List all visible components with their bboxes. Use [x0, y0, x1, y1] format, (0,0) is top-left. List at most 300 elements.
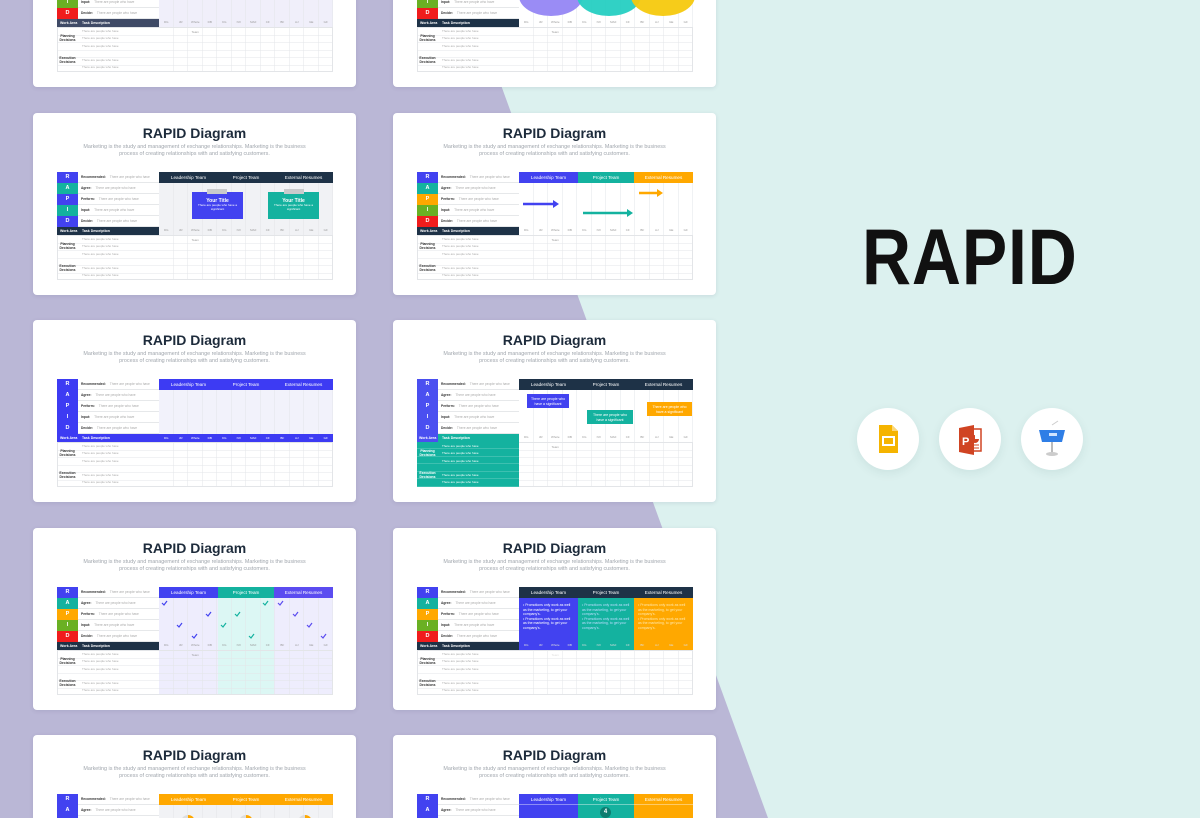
- card: row4 left checkmarks: RAPID Diagram: [143, 540, 246, 556]
- card: row2 right arrows: AJ: [655, 228, 658, 232]
- card: row3 right boxes: process of creating relationships with and satisfying customers.: [479, 358, 630, 364]
- card: row4 right filled columns: I: [427, 622, 428, 628]
- card: row3 left all blue: BF: [280, 436, 284, 440]
- card: row4 left checkmarks: Execution Decisions: [59, 679, 76, 687]
- card: row4 right filled columns: MAF: [610, 643, 616, 647]
- card: row4 right filled columns: GE: [669, 643, 673, 647]
- card: row3 left all blue: External Resumes: [285, 382, 322, 387]
- boxes: [527, 394, 569, 408]
- card: row4 left checkmarks: Decide: There are people who have: [81, 634, 137, 638]
- card: row1 left: JR: [179, 20, 183, 24]
- card: row2 right arrows: Marketing is the study and management of exchange relationships. Marketing is the business: [443, 144, 666, 150]
- card: row3 right boxes: Agree: There are people who have: [441, 393, 496, 397]
- card: row2 left sticky notes: D: [66, 218, 69, 224]
- card: row4 left checkmarks: Leadership Team: [171, 590, 206, 595]
- card: row3 right boxes: There are people who have: [442, 444, 479, 448]
- card: row3 right boxes: R: [426, 381, 429, 387]
- card: row3 left all blue: Agree: There are people who have: [81, 393, 136, 397]
- card: row5 right colored columns: A: [426, 807, 429, 813]
- card: row1 left: AJ: [295, 20, 298, 24]
- card: row4 left checkmarks: KG: [222, 643, 226, 647]
- card: row3 left all blue: process of creating relationships with and satisfying customers.: [119, 358, 270, 364]
- card: row3 right boxes: I: [427, 414, 428, 420]
- card: row1 left: [33, 0, 356, 87]
- card: row4 left checkmarks: Project Team: [233, 590, 259, 595]
- card: row1 right venn: Whole Team: [551, 20, 560, 34]
- card: row4 left checkmarks: DB: [208, 643, 212, 647]
- card: row3 right boxes: CF: [626, 435, 630, 439]
- card: row3 left all blue: There are people who have: [82, 451, 119, 455]
- card: row5 left orange headers: External Resumes: [285, 797, 322, 802]
- card: row1 right venn: Execution Decisions: [419, 56, 436, 64]
- card: row3 right boxes: P: [426, 403, 429, 409]
- card: row5 left orange headers: RAPID Diagram: [143, 747, 246, 763]
- card: row3 left all blue: CF: [266, 436, 270, 440]
- card: row3 right boxes: There are people who have: [442, 451, 479, 455]
- card: row4 right filled columns: Execution Decisions: [419, 679, 436, 687]
- card: row1 right venn: Decide: There are people who have: [441, 11, 497, 15]
- card: row4 left checkmarks: There are people who have: [82, 659, 119, 663]
- column texts: • Promotions only work as well as the marketing, to get your company's.: [523, 603, 570, 616]
- card: row4 right filled columns: NX: [597, 643, 601, 647]
- card: row3 left all blue: GE: [309, 436, 313, 440]
- card: row2 right arrows: Input: There are people who have: [441, 208, 494, 212]
- card: row1 right venn: DB: [568, 20, 572, 24]
- card: row2 left sticky notes: Perform: There are people who have: [81, 197, 139, 201]
- card: row2 right arrows: GE: [669, 228, 673, 232]
- venn circles: [520, 0, 694, 16]
- card: row2 right arrows: RAPID Diagram: [503, 125, 606, 141]
- card: row2 right arrows: Agree: There are people who have: [441, 186, 496, 190]
- card: row4 left checkmarks: Marketing is the study and management of exchange relationships. Marketing is the business: [83, 559, 306, 565]
- card: row2 left sticky notes: Whole Team: [191, 228, 200, 242]
- card: row3 left all blue: Task Description: [82, 436, 110, 440]
- card: row2 left sticky notes: AJ: [295, 228, 298, 232]
- card: row1 left: CF: [266, 20, 270, 24]
- card: row4 left checkmarks: There are people who have: [82, 667, 119, 671]
- card: row2 right arrows: CF: [626, 228, 630, 232]
- card: row4 right filled columns: External Resumes: [645, 590, 682, 595]
- icon: keynote: [1021, 408, 1083, 470]
- card: row2 left sticky notes: Work Area: [60, 229, 77, 233]
- card: row4 right filled columns: Recommended: There are people who have: [441, 590, 510, 594]
- card: row2 left sticky notes: R: [66, 174, 69, 180]
- card: row2 left sticky notes: Execution Decisions: [59, 264, 76, 272]
- card: row3 right boxes: There are people who have: [442, 480, 479, 484]
- card: row1 left: There are people who have: [82, 44, 119, 48]
- card: row4 left checkmarks: Input: There are people who have: [81, 623, 134, 627]
- number badge: [600, 807, 611, 818]
- icon: powerpoint: P: [962, 436, 969, 448]
- card: row3 right boxes: DB: [568, 435, 572, 439]
- card: row2 right arrows: A: [426, 185, 429, 191]
- card: row1 left: There are people who have: [82, 29, 119, 33]
- card: row2 right arrows: External Resumes: [645, 175, 682, 180]
- card: row3 right boxes: MAF: [610, 435, 616, 439]
- card: row1 right venn: MAF: [610, 20, 616, 24]
- card: row3 right boxes: Planning Decisions: [419, 449, 436, 457]
- card: row4 left checkmarks: P: [66, 611, 69, 617]
- card: row1 left: DG: [164, 20, 168, 24]
- card: row1 right venn: BF: [640, 20, 644, 24]
- card: row2 right arrows: [393, 113, 716, 295]
- card: row4 right filled columns: • Promotions only work as well as the marketing, to get your company's.: [638, 616, 685, 630]
- card: row2 right arrows: MAF: [610, 228, 616, 232]
- card: row4 right filled columns: • Promotions only work as well as the marketing, to get your company's.: [582, 616, 629, 630]
- icon: google slides: [857, 408, 919, 470]
- card: row3 right boxes: GF: [684, 435, 688, 439]
- arrows: [523, 189, 663, 217]
- card: row2 right arrows: Recommended: There are people who have: [441, 175, 510, 179]
- card: row4 left checkmarks: External Resumes: [285, 590, 322, 595]
- card: row4 left checkmarks: Agree: There are people who have: [81, 601, 136, 605]
- card: row4 right filled columns: RAPID Diagram: [503, 540, 606, 556]
- card: row5 right colored columns: process of creating relationships with and satisfying customers.: [479, 773, 630, 779]
- card: row4 left checkmarks: [33, 528, 356, 710]
- card: row2 right arrows: Planning Decisions: [419, 242, 436, 250]
- card: row2 right arrows: Leadership Team: [531, 175, 566, 180]
- card: row3 left all blue: NX: [237, 436, 241, 440]
- card: row2 right arrows: There are people who have: [442, 237, 479, 241]
- card: row1 right venn: GE: [669, 20, 673, 24]
- card: row1 right venn: DG: [524, 20, 528, 24]
- card: row4 right filled columns: • Promotions only work as well as the marketing, to get your company's.: [582, 603, 629, 616]
- card: row4 right filled columns: Work Area: [420, 644, 437, 648]
- card: row3 right boxes: BF: [640, 435, 644, 439]
- card: row4 right filled columns: There are people who have: [442, 652, 479, 656]
- card: row4 right filled columns: Input: There are people who have: [441, 623, 494, 627]
- sticky note teal: There are people who have a significant: [274, 203, 313, 211]
- card: row4 right filled columns: BF: [640, 643, 644, 647]
- checkmarks: [162, 600, 326, 639]
- card: row3 left all blue: R: [66, 381, 69, 387]
- card: row3 left all blue: Work Area: [60, 436, 77, 440]
- card: row2 right arrows: There are people who have: [442, 244, 479, 248]
- card: row2 left sticky notes: A: [66, 185, 69, 191]
- card: row1 right venn: Task Description: [442, 21, 470, 25]
- card: row3 right boxes: External Resumes: [645, 382, 682, 387]
- card: row3 right boxes: Whole Team: [551, 435, 560, 449]
- card: row5 left orange headers: Leadership Team: [171, 797, 206, 802]
- card: row4 right filled columns: There are people who have: [442, 659, 479, 663]
- card: row3 right boxes: There are people who have: [442, 459, 479, 463]
- sticky note blue: Your Title: [206, 198, 229, 204]
- card: row3 right boxes: There are people who have a significant: [652, 405, 687, 414]
- card: row2 left sticky notes: JR: [179, 228, 183, 232]
- card: row1 left: MAF: [250, 20, 256, 24]
- card: row2 left sticky notes: There are people who have: [82, 252, 119, 256]
- card: row1 left: Whole Team: [191, 20, 200, 34]
- card: row3 left all blue: Input: There are people who have: [81, 415, 134, 419]
- card: row1 left: DB: [208, 20, 212, 24]
- card: row1 right venn: Work Area: [420, 21, 437, 25]
- card: row4 left checkmarks: Planning Decisions: [59, 657, 76, 665]
- card: row1 left: KG: [222, 20, 226, 24]
- card: row2 left sticky notes: Input: There are people who have: [81, 208, 134, 212]
- card: row4 left checkmarks: AJ: [295, 643, 298, 647]
- column texts: [519, 598, 578, 650]
- card: row3 right boxes: JR: [539, 435, 543, 439]
- card: row4 right filled columns: process of creating relationships with and satisfying customers.: [479, 566, 630, 572]
- sticky note teal: Your Title: [282, 198, 305, 204]
- card: row4 right filled columns: Marketing is the study and management of exchange relationships. Marketing is the business: [443, 559, 666, 565]
- card: row1 right venn: KG: [582, 20, 586, 24]
- card: row5 right colored columns: Marketing is the study and management of exchange relationships. Marketing is the business: [443, 766, 666, 772]
- card: row5 left orange headers: Agree: There are people who have: [81, 808, 136, 812]
- card: row1 right venn: NX: [597, 20, 601, 24]
- sticky note blue: [192, 192, 243, 219]
- card: row5 right colored columns: Leadership Team: [531, 797, 566, 802]
- card: row4 right filled columns: A: [426, 600, 429, 606]
- card: row2 left sticky notes: There are people who have: [82, 237, 119, 241]
- card: row5 left orange headers: [33, 735, 356, 818]
- card: row3 left all blue: Leadership Team: [171, 382, 206, 387]
- card: row5 left orange headers: Recommended: There are people who have: [81, 797, 150, 801]
- card: row3 right boxes: NX: [597, 435, 601, 439]
- card: row4 left checkmarks: process of creating relationships with and satisfying customers.: [119, 566, 270, 572]
- card: row3 left all blue: Planning Decisions: [59, 449, 76, 457]
- card: row4 right filled columns: DB: [568, 643, 572, 647]
- card: row1 left: There are people who have: [82, 65, 119, 69]
- card: row3 right boxes: [393, 320, 716, 502]
- card: row2 left sticky notes: process of creating relationships with and satisfying customers.: [119, 151, 270, 157]
- card: row3 left all blue: RAPID Diagram: [143, 332, 246, 348]
- card: row3 left all blue: There are people who have: [82, 473, 119, 477]
- card: row3 right boxes: Project Team: [593, 382, 619, 387]
- card: row5 right colored columns: Recommended: There are people who have: [441, 797, 510, 801]
- card: row3 right boxes: There are people who have a significant: [593, 413, 627, 422]
- card: row2 right arrows: Perform: There are people who have: [441, 197, 499, 201]
- card: row3 right boxes: Execution Decisions: [419, 471, 436, 479]
- card: row1 right venn: There are people who have: [442, 58, 479, 62]
- card: row5 left orange headers: A: [66, 807, 69, 813]
- card: row3 right boxes: AJ: [655, 435, 658, 439]
- card: row2 left sticky notes: Leadership Team: [171, 175, 206, 180]
- card: row4 right filled columns: CF: [626, 643, 630, 647]
- card: row3 left all blue: MAF: [250, 436, 256, 440]
- card: row2 left sticky notes: There are people who have: [82, 273, 119, 277]
- card: row4 left checkmarks: R: [66, 589, 69, 595]
- card: row3 left all blue: There are people who have: [82, 459, 119, 463]
- card: row4 right filled columns: Project Team: [593, 590, 619, 595]
- card: row1 left: D: [66, 10, 69, 16]
- card: row3 left all blue: There are people who have: [82, 480, 119, 484]
- card: row3 right boxes: Marketing is the study and management of exchange relationships. Marketing is the business: [443, 351, 666, 357]
- card: row2 left sticky notes: DB: [208, 228, 212, 232]
- sticky note teal: [268, 192, 319, 219]
- card: row1 right venn: CF: [626, 20, 630, 24]
- card: row3 right boxes: Task Description: [442, 436, 470, 440]
- card: row4 left checkmarks: Whole Team: [191, 643, 200, 657]
- card: row4 right filled columns: KG: [582, 643, 586, 647]
- icon: powerpoint: [939, 408, 1001, 470]
- card: row2 right arrows: Project Team: [593, 175, 619, 180]
- card: row1 left: There are people who have: [82, 58, 119, 62]
- card: row2 right arrows: process of creating relationships with and satisfying customers.: [479, 151, 630, 157]
- card: row2 left sticky notes: Agree: There are people who have: [81, 186, 136, 190]
- card: row2 left sticky notes: RAPID Diagram: [143, 125, 246, 141]
- card: row2 left sticky notes: Task Description: [82, 229, 110, 233]
- card: row4 left checkmarks: BF: [280, 643, 284, 647]
- card: row4 right filled columns: Whole Team: [551, 643, 560, 657]
- card: row3 right boxes: Decide: There are people who have: [441, 426, 497, 430]
- title RAPID: RAPID: [862, 212, 1078, 301]
- card: row1 left: BF: [280, 20, 284, 24]
- card: row3 left all blue: P: [66, 403, 69, 409]
- card: row5 right colored columns: [393, 735, 716, 818]
- card: row1 right venn: AJ: [655, 20, 658, 24]
- number badge: 4: [604, 809, 607, 815]
- card: row1 left: NX: [237, 20, 241, 24]
- card: row4 right filled columns: There are people who have: [442, 688, 479, 692]
- card: row2 right arrows: There are people who have: [442, 266, 479, 270]
- card: row3 left all blue: D: [66, 425, 69, 431]
- card: row5 left orange headers: process of creating relationships with and satisfying customers.: [119, 773, 270, 779]
- card: row1 left: There are people who have: [82, 36, 119, 40]
- card: row4 left checkmarks: Task Description: [82, 644, 110, 648]
- card: row3 left all blue: JR: [179, 436, 183, 440]
- card: row3 left all blue: GF: [324, 436, 328, 440]
- card: row5 right colored columns: RAPID Diagram: [503, 747, 606, 763]
- column texts: • Promotions only work as well as the marketing, to get your company's.: [523, 616, 570, 630]
- card: row5 right colored columns: Agree: There are people who have: [441, 808, 496, 812]
- card: row3 left all blue: Execution Decisions: [59, 471, 76, 479]
- card: row2 right arrows: P: [426, 196, 429, 202]
- card: row3 right boxes: GE: [669, 435, 673, 439]
- card: row3 left all blue: Whole Team: [191, 436, 200, 448]
- card: row3 left all blue: KG: [222, 436, 226, 440]
- card: row3 right boxes: Input: There are people who have: [441, 415, 494, 419]
- card: row2 left sticky notes: There are people who have: [82, 266, 119, 270]
- card: row1 left: GF: [324, 20, 328, 24]
- card: row2 left sticky notes: MAF: [250, 228, 256, 232]
- card: row1 left: GE: [309, 20, 313, 24]
- card: row3 right boxes: Recommended: There are people who have: [441, 382, 510, 386]
- card: row4 left checkmarks: NX: [237, 643, 241, 647]
- card: row2 right arrows: D: [426, 218, 429, 224]
- card: row2 left sticky notes: Planning Decisions: [59, 242, 76, 250]
- card: row4 right filled columns: GF: [684, 643, 688, 647]
- card: row4 right filled columns: AJ: [655, 643, 658, 647]
- card: row3 right boxes: A: [426, 392, 429, 398]
- card: row2 right arrows: Decide: There are people who have: [441, 219, 497, 223]
- card: row4 right filled columns: [393, 528, 716, 710]
- card: row2 left sticky notes: CF: [266, 228, 270, 232]
- card: row4 left checkmarks: A: [66, 600, 69, 606]
- card: row3 right boxes: Perform: There are people who have: [441, 404, 499, 408]
- card: row4 left checkmarks: D: [66, 633, 69, 639]
- card: row4 right filled columns: Perform: There are people who have: [441, 612, 499, 616]
- card: row2 left sticky notes: [33, 113, 356, 295]
- card: row4 left checkmarks: I: [67, 622, 68, 628]
- card: row4 left checkmarks: Recommended: There are people who have: [81, 590, 150, 594]
- card: row4 right filled columns: Planning Decisions: [419, 657, 436, 665]
- card: row4 left checkmarks: MAF: [250, 643, 256, 647]
- card: row4 right filled columns: Agree: There are people who have: [441, 601, 496, 605]
- card: row4 right filled columns: D: [426, 633, 429, 639]
- card: row3 left all blue: [33, 320, 356, 502]
- card: row2 left sticky notes: Project Team: [233, 175, 259, 180]
- card: row2 left sticky notes: External Resumes: [285, 175, 322, 180]
- card: row1 left: Execution Decisions: [59, 56, 76, 64]
- card: row2 right arrows: Work Area: [420, 229, 437, 233]
- card: row2 left sticky notes: Decide: There are people who have: [81, 219, 137, 223]
- card: row3 left all blue: DB: [208, 436, 212, 440]
- card: row5 left orange headers: Marketing is the study and management of exchange relationships. Marketing is the business: [83, 766, 306, 772]
- card: row3 right boxes: Leadership Team: [531, 382, 566, 387]
- card: row4 left checkmarks: There are people who have: [82, 652, 119, 656]
- card: row1 right venn: There are people who have: [442, 44, 479, 48]
- card: row2 left sticky notes: KG: [222, 228, 226, 232]
- card: row3 left all blue: Project Team: [233, 382, 259, 387]
- card: row2 left sticky notes: DG: [164, 228, 168, 232]
- card: row4 right filled columns: Decide: There are people who have: [441, 634, 497, 638]
- card: row1 right venn: There are people who have: [442, 36, 479, 40]
- card: row2 right arrows: NX: [597, 228, 601, 232]
- card: row2 left sticky notes: P: [66, 196, 69, 202]
- card: row1 right venn: [393, 0, 716, 87]
- card: row2 right arrows: Task Description: [442, 229, 470, 233]
- card: row3 left all blue: Recommended: There are people who have: [81, 382, 150, 386]
- card: row3 right boxes: D: [426, 425, 429, 431]
- card: row1 right venn: There are people who have: [442, 65, 479, 69]
- card: row3 left all blue: I: [67, 414, 68, 420]
- card: row3 left all blue: There are people who have: [82, 444, 119, 448]
- card: row2 right arrows: BF: [640, 228, 644, 232]
- card: row4 right filled columns: JR: [539, 643, 543, 647]
- card: row5 left orange headers: Project Team: [233, 797, 259, 802]
- card: row4 right filled columns: • Promotions only work as well as the marketing, to get your company's.: [638, 603, 685, 616]
- card: row3 left all blue: Marketing is the study and management of exchange relationships. Marketing is the business: [83, 351, 306, 357]
- card: row1 left: Planning Decisions: [59, 34, 76, 42]
- card: row4 right filled columns: Task Description: [442, 644, 470, 648]
- card: row2 left sticky notes: I: [67, 207, 68, 213]
- card: row2 right arrows: JR: [539, 228, 543, 232]
- card: row2 right arrows: GF: [684, 228, 688, 232]
- card: row5 right colored columns: Project Team: [593, 797, 619, 802]
- card: row2 left sticky notes: There are people who have: [82, 244, 119, 248]
- card: row4 left checkmarks: Work Area: [60, 644, 77, 648]
- card: row4 right filled columns: There are people who have: [442, 681, 479, 685]
- card: row4 left checkmarks: GF: [324, 643, 328, 647]
- card: row1 right venn: Input: There are people who have: [441, 0, 494, 4]
- pie circles: [182, 815, 311, 818]
- card: row5 right colored columns: External Resumes: [645, 797, 682, 802]
- card: row3 right boxes: There are people who have: [442, 473, 479, 477]
- card: row4 left checkmarks: CF: [266, 643, 270, 647]
- sticky note blue: There are people who have a significant: [198, 203, 237, 211]
- card: row1 right venn: There are people who have: [442, 29, 479, 33]
- card: row3 left all blue: DG: [164, 436, 168, 440]
- card: row3 left all blue: Decide: There are people who have: [81, 426, 137, 430]
- card: row2 right arrows: DG: [524, 228, 528, 232]
- card: row3 left all blue: Perform: There are people who have: [81, 404, 139, 408]
- card: row2 left sticky notes: GF: [324, 228, 328, 232]
- card: row2 left sticky notes: BF: [280, 228, 284, 232]
- card: row1 right venn: GF: [684, 20, 688, 24]
- card: row3 right boxes: Work Area: [419, 436, 436, 440]
- card: row2 right arrows: There are people who have: [442, 273, 479, 277]
- card: row2 left sticky notes: NX: [237, 228, 241, 232]
- card: row2 left sticky notes: Recommended: There are people who have: [81, 175, 150, 179]
- card: row4 right filled columns: R: [426, 589, 429, 595]
- card: row4 left checkmarks: There are people who have: [82, 688, 119, 692]
- card: row3 right boxes: DG: [524, 435, 528, 439]
- card: row4 right filled columns: Leadership Team: [531, 590, 566, 595]
- card: row5 left orange headers: R: [66, 796, 69, 802]
- card: row2 right arrows: I: [427, 207, 428, 213]
- card: row4 right filled columns: DG: [524, 643, 528, 647]
